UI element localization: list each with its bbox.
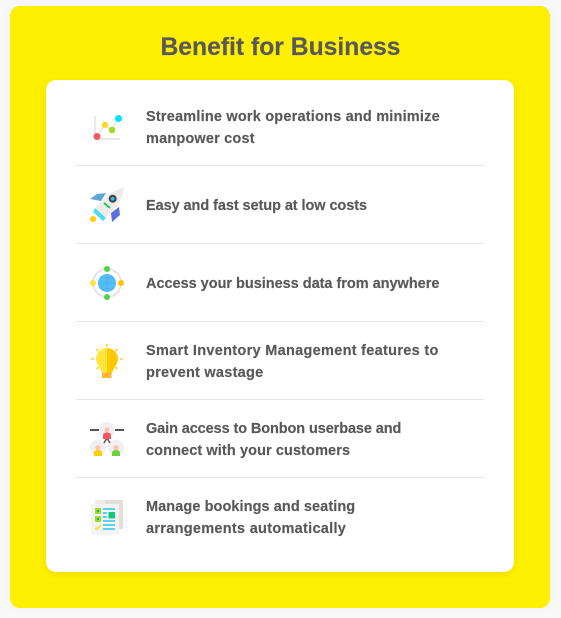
text: benefit 5: Gain access to Bonbon userbase and [146, 421, 401, 437]
text: benefit 6 [146, 499, 355, 537]
icon: booking checklist [91, 500, 123, 534]
panel: white benefits card [46, 80, 514, 572]
text: benefit 2: Easy and fast setup at low costs [146, 198, 367, 214]
text: benefit 6: Manage bookings and seating [146, 499, 355, 515]
text: benefit 1: manpower cost [146, 131, 255, 147]
text: benefit 6: arrangements automatically [146, 521, 346, 537]
text: benefit 4: prevent wastage [146, 365, 263, 381]
text: benefit 4 [146, 343, 439, 381]
text: benefit 1: Streamline work operations and minimize [146, 109, 440, 125]
text: benefit 3: Access your business data from anywhere [146, 276, 439, 292]
text: benefit 5: connect with your customers [146, 443, 350, 459]
icon: globe [90, 266, 124, 300]
icon: user network [90, 422, 124, 456]
title: Benefit for Business [160, 34, 401, 61]
text: benefit 5 [146, 421, 401, 459]
icon: line chart [94, 115, 122, 140]
text: benefit 1 [146, 109, 440, 147]
text: benefit 4: Smart Inventory Management features to [146, 343, 439, 359]
icon: light bulb [91, 344, 123, 378]
icon: rocket [90, 188, 124, 222]
